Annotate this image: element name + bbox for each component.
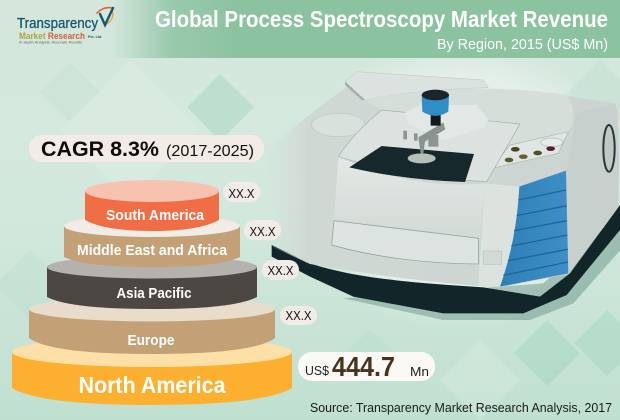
press arm: [418, 122, 445, 153]
tier: South America: [85, 180, 219, 231]
CAGR callout: (2017-2025): [166, 143, 254, 160]
value label: Asia Pacific: [262, 260, 299, 280]
tier: Middle East and Africa: [64, 215, 240, 267]
sample stage: [338, 110, 520, 182]
tier: North America: North America: [78, 372, 226, 398]
front drawer: [332, 221, 478, 264]
device body: [268, 87, 619, 287]
lid left shade: [345, 82, 365, 100]
control panel: [492, 132, 568, 168]
subtitle: By Region, 2015 (US$ Mn): [437, 36, 608, 53]
value label: Middle East and Africa: [244, 220, 281, 240]
logo check mark: [97, 8, 113, 25]
top lid: [345, 72, 488, 100]
tier: Asia Pacific: [47, 256, 257, 309]
top surface curve: [338, 89, 574, 182]
value label: Asia Pacific: XX.X: [268, 263, 294, 278]
value label: South America: [223, 182, 260, 202]
front upper panel: [334, 157, 485, 237]
tier: South America: South America: [106, 207, 205, 224]
tier: Middle East and Africa: Middle East and Africa: [77, 242, 228, 259]
raised mount: [403, 105, 488, 140]
left recess: [312, 113, 365, 137]
tier: Asia Pacific: Asia Pacific: [116, 285, 192, 302]
tier: Europe: [29, 296, 275, 354]
turret cap: [422, 90, 449, 100]
CAGR callout: CAGR 8.3%: [41, 138, 159, 161]
value callout: North America: US$: [305, 363, 330, 378]
value label: Middle East and Africa: XX.X: [250, 224, 276, 239]
value label: Europe: XX.X: [286, 308, 312, 323]
spectrometer device illustration: [268, 72, 620, 320]
logo tagline: In-depth Analysis. Accurate Results: [19, 40, 82, 44]
value callout: North America: [298, 351, 435, 382]
source note: Source: Transparency Market Research Analysis, 2017: [310, 400, 612, 415]
blue side panel: [500, 171, 568, 287]
value callout: North America: 444.7: [332, 351, 395, 382]
sample tray: [349, 146, 474, 182]
tier: Europe: Europe: [128, 332, 174, 349]
side column badge: [483, 251, 502, 264]
tier: North America: [12, 337, 292, 405]
right face: [567, 103, 619, 274]
stage posts: [403, 131, 438, 147]
device base: [272, 205, 620, 313]
side port: [603, 125, 615, 172]
side column: [478, 183, 520, 287]
blue turret: [422, 95, 449, 116]
press neck: [431, 115, 441, 126]
value callout: North America: Mn: [410, 364, 429, 379]
pyramid chart: [12, 180, 292, 405]
value label: Europe: [280, 306, 317, 325]
logo wordmark: Transparency: [17, 15, 98, 32]
sample disc: [408, 153, 436, 163]
logo suffix: Pvt. Ltd.: [88, 35, 102, 39]
logo market research: Market Research: [19, 31, 85, 42]
logo: [17, 8, 113, 44]
header band: [110, 0, 620, 58]
device shadow: [343, 210, 620, 320]
CAGR callout: [29, 135, 264, 162]
value label: South America: XX.X: [228, 186, 255, 201]
